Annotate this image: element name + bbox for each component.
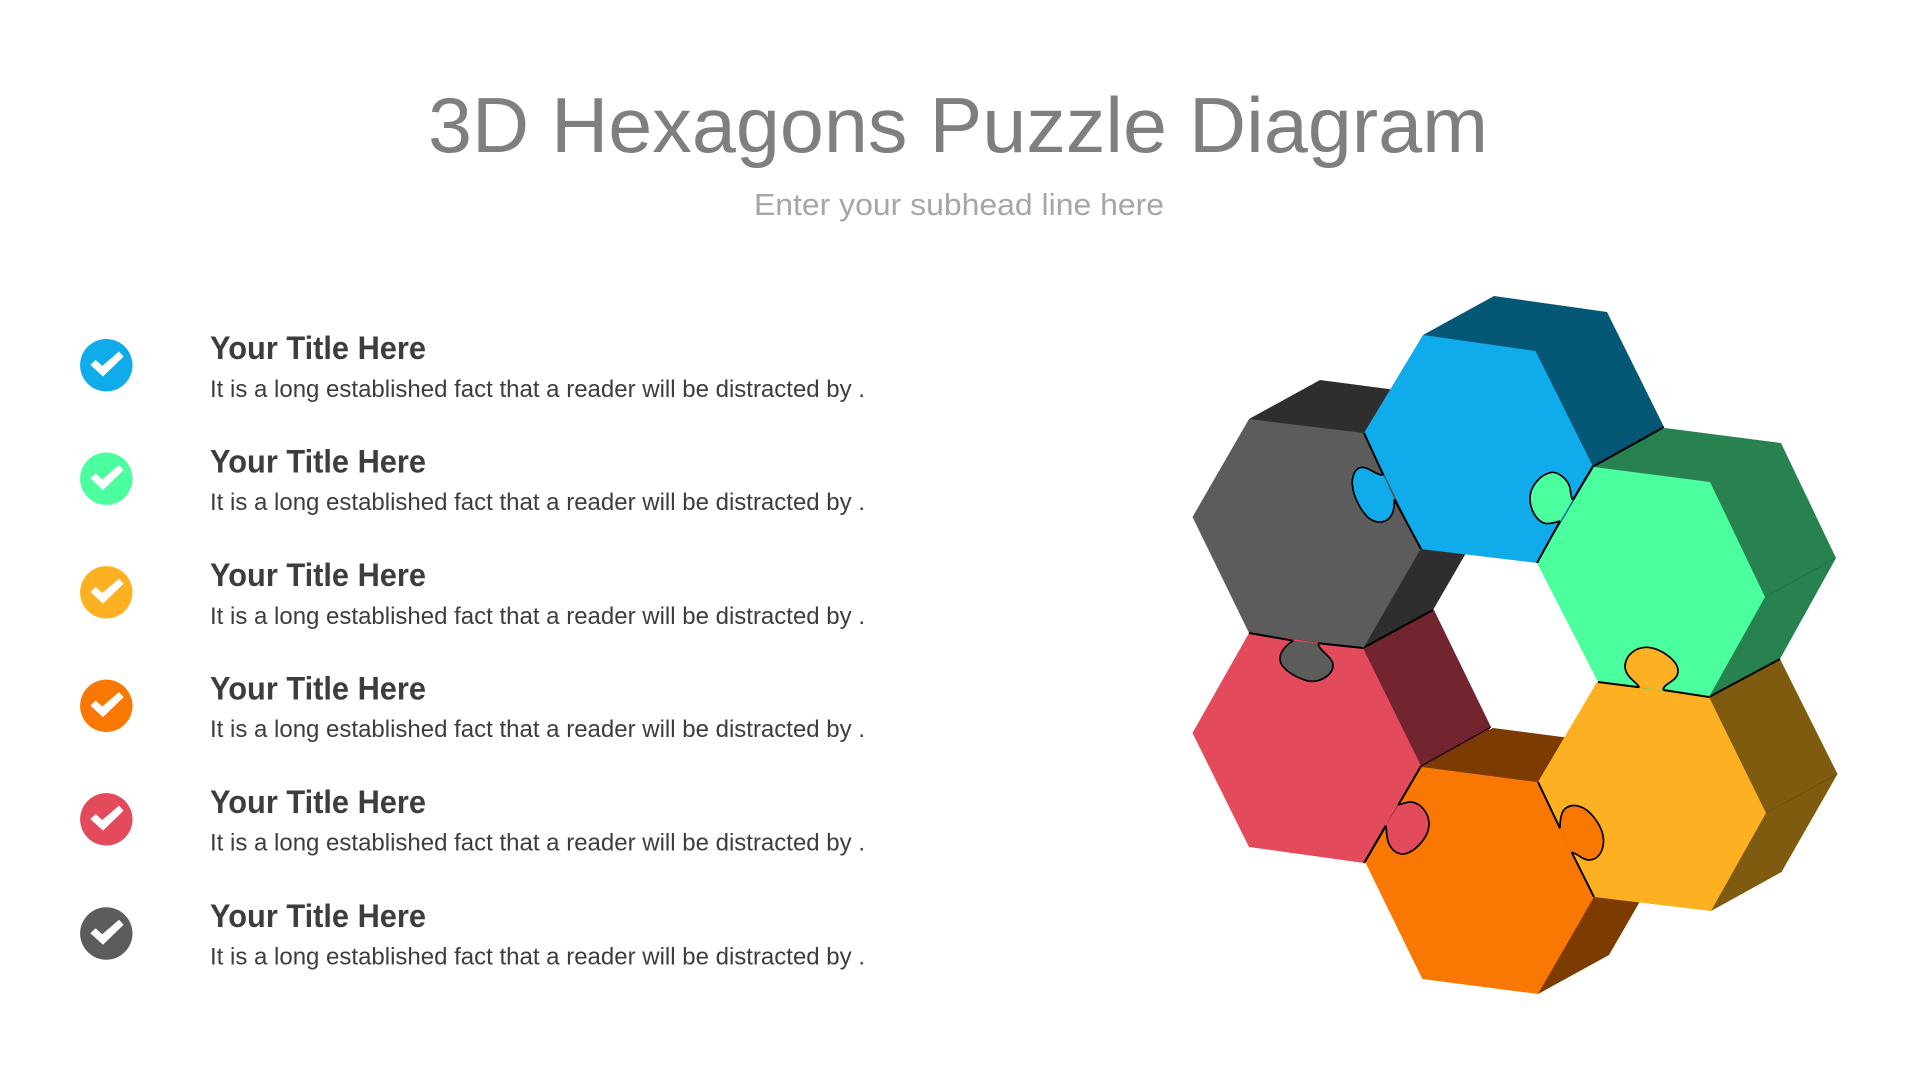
item 5 title: Your Title Here (210, 784, 426, 820)
title: 3D Hexagons Puzzle Diagram (428, 81, 1488, 169)
icon: red check (80, 793, 132, 846)
item 6 text: It is a long established fact that a reader will be distracted by . (210, 944, 865, 970)
list item 5 (80, 784, 865, 856)
side faces of the hexagons (1249, 296, 1838, 994)
item 5 text: It is a long established fact that a reader will be distracted by . (210, 830, 865, 856)
item 1 text: It is a long established fact that a reader will be distracted by . (210, 376, 865, 403)
list item 4 (80, 670, 865, 743)
icon: green check (80, 452, 132, 505)
hexagon: green (1537, 467, 1765, 697)
item 6 title: Your Title Here (210, 898, 426, 934)
joint between red and gray with gray tab (1249, 633, 1363, 681)
seam lines between side faces (1363, 427, 1838, 813)
hexagon: blue (1364, 335, 1592, 563)
joint between orange and red with red tab (1364, 766, 1429, 863)
joint between green and yellow with yellow tab (1598, 647, 1709, 697)
list item 3 (80, 557, 865, 630)
list item 2 (80, 444, 865, 516)
hexagon: yellow (1538, 682, 1766, 911)
list item 1 (80, 330, 865, 403)
item 2 title: Your Title Here (210, 444, 426, 480)
joint between yellow and orange with orange tab (1538, 782, 1604, 897)
icon: blue check (80, 339, 132, 391)
joint between blue and green with green tab (1530, 466, 1593, 563)
checklist (80, 330, 865, 970)
item 4 text: It is a long established fact that a reader will be distracted by . (210, 716, 865, 743)
hexagon: gray (1192, 419, 1421, 648)
item 3 title: Your Title Here (210, 557, 426, 593)
item 4 title: Your Title Here (210, 670, 426, 706)
joint between gray and blue with blue tab (1352, 433, 1421, 549)
item 3 text: It is a long established fact that a reader will be distracted by . (210, 603, 865, 630)
hexagon: red (1192, 633, 1421, 863)
icon: orange check (80, 680, 132, 732)
3D hexagon puzzle diagram (1192, 296, 1838, 994)
list item 6 (80, 898, 865, 970)
icon: gray check (80, 907, 132, 960)
subtitle: Enter your subhead line here (754, 187, 1164, 222)
hexagon: orange (1366, 767, 1594, 994)
item 2 text: It is a long established fact that a reader will be distracted by . (210, 489, 865, 516)
icon: yellow check (80, 566, 132, 618)
item 1 title: Your Title Here (210, 330, 426, 366)
